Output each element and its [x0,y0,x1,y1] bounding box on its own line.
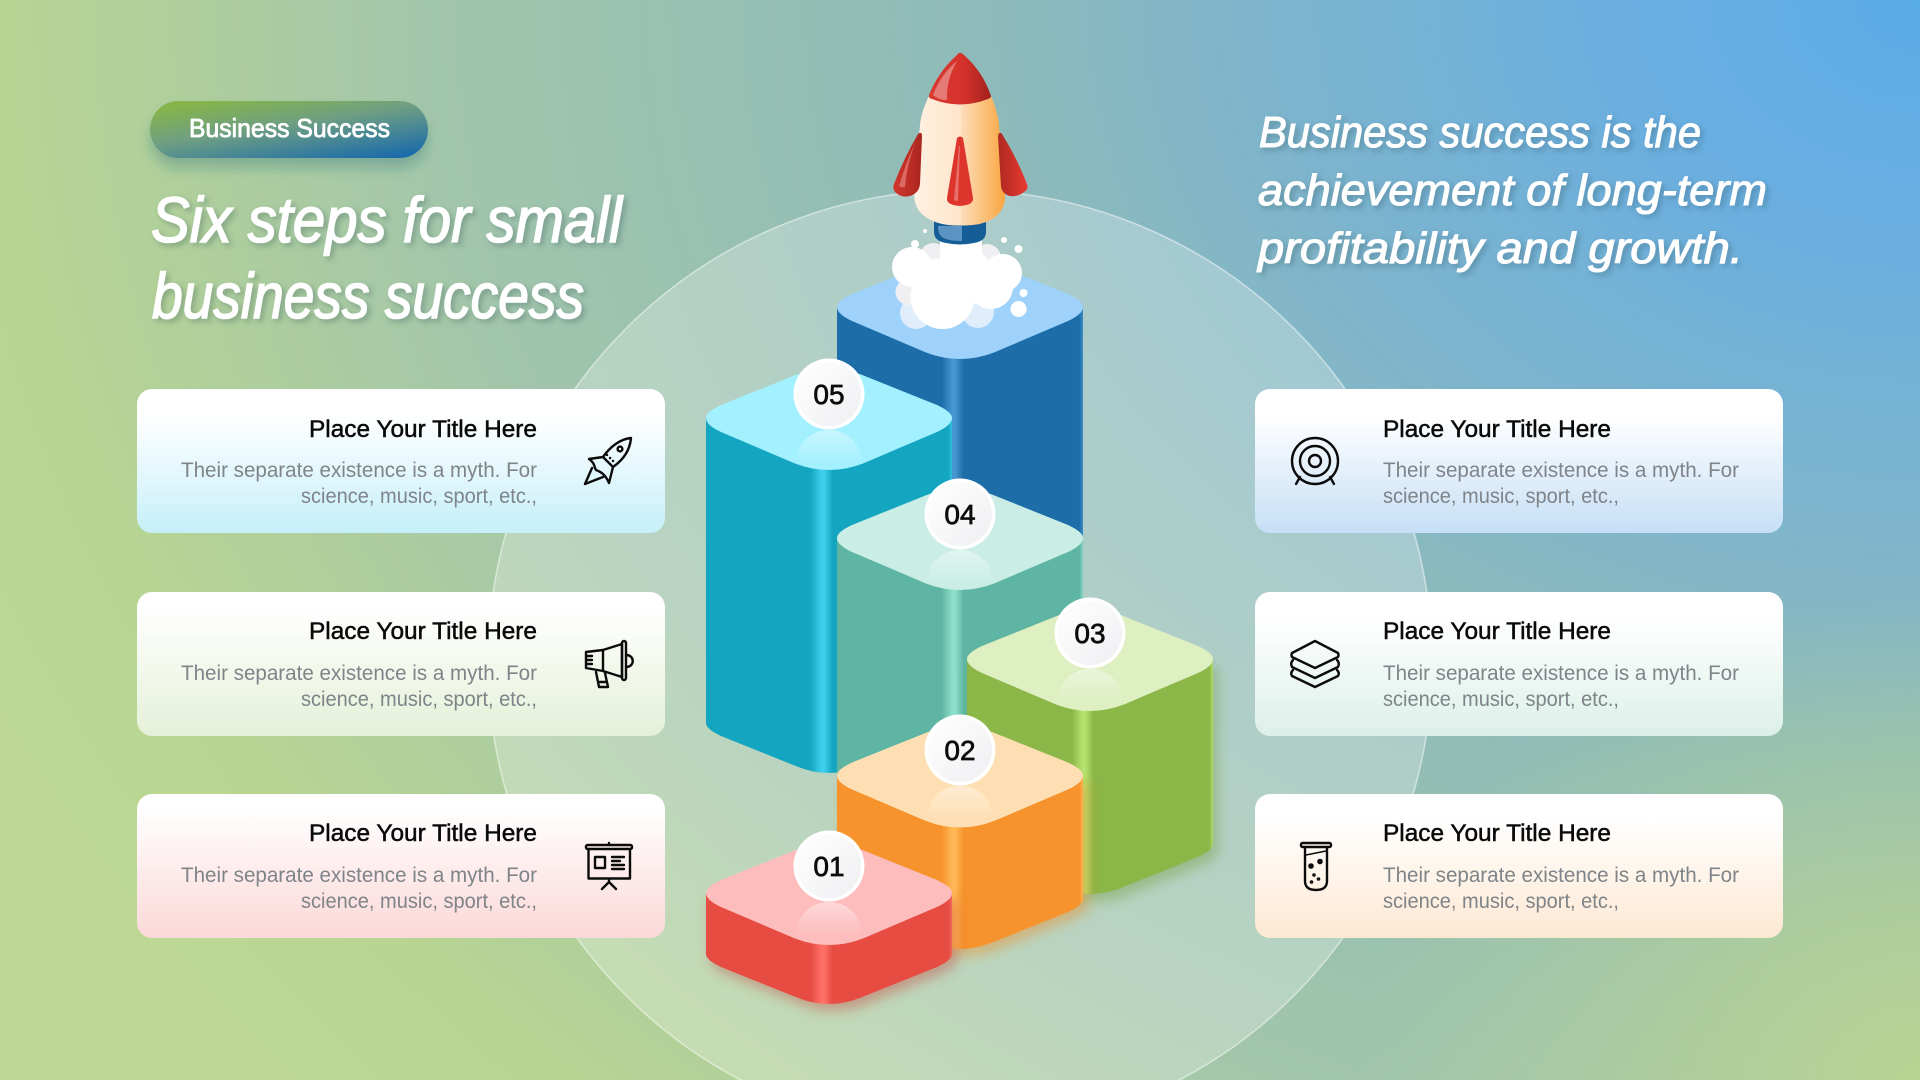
main title: Six steps for small [151,184,624,256]
badge 02 [924,714,996,846]
block 01: red column [706,843,957,1011]
block 02: orange column [837,726,1088,956]
panel: left card 3 [137,794,665,938]
panel: right card 1: Place Your Title Here [1383,416,1611,443]
block 05: cyan column [706,368,952,773]
panel: left card 3: Place Your Title Here [309,820,537,847]
panel: right card 1: science, music, sport, etc., [1383,485,1619,508]
badge 04 [924,478,996,610]
panel: left card 3: Their separate existence is a myth. For [181,864,537,887]
nozzle [934,218,986,244]
badge 05: 05 [813,379,845,410]
badge 03: 03 [1074,618,1106,649]
panel: right card 3: Place Your Title Here [1383,820,1611,847]
icon: target [1292,438,1338,484]
panel: left card 2 [137,592,665,736]
badge 05 [794,358,864,490]
icon: test tube [1301,843,1331,890]
icon: rocket [585,438,631,484]
badge 03 [1054,598,1126,729]
centre fin [947,136,973,206]
side fins [893,133,1028,197]
panel: left card 3: science, music, sport, etc., [301,890,537,913]
right statement heading [1256,108,1767,273]
panel: right card 2 [1255,592,1783,736]
badge 01 [794,830,864,962]
panel: left card 2: science, music, sport, etc., [301,688,537,711]
panel: left card 2: Place Your Title Here [309,618,537,645]
right statement heading: Business success is the [1259,108,1701,157]
panel: right card 2: Place Your Title Here [1383,618,1611,645]
panel: right card 2: science, music, sport, etc., [1383,688,1619,711]
nose cone [929,53,991,104]
badge 04: 04 [944,499,976,530]
icon: layers [1291,641,1339,687]
category pill: Business Success [150,101,428,168]
badge 02: 02 [944,735,976,766]
icon: megaphone [586,641,633,687]
rocket body [914,96,1005,226]
panel: right card 2: Their separate existence is a myth. For [1383,662,1739,685]
panel: right card 1 [1255,389,1783,533]
panel: right card 1: Their separate existence is a myth. For [1383,459,1739,482]
right statement heading: profitability and growth. [1256,224,1743,273]
block 06: blue column [837,257,1083,617]
block 04: teal column [837,488,1083,838]
panel: left card 2: Their separate existence is a myth. For [181,662,537,685]
icon: presentation board [586,843,632,889]
main title: business success [152,260,584,332]
badge 01: 01 [813,851,845,882]
main title [151,184,624,332]
panel: left card 1 [137,389,665,533]
translucent background circle [488,190,1432,1080]
panel: left card 1: Their separate existence is a myth. For [181,459,537,482]
panel: left card 1: Place Your Title Here [309,416,537,443]
rocket with exhaust cloud [892,53,1028,329]
exhaust cloud [892,229,1028,329]
panel: right card 3: Their separate existence is a myth. For [1383,864,1739,887]
category pill: Business Success: Business Success [189,113,390,143]
right statement heading: achievement of long-term [1258,166,1767,215]
block 03: green column [967,609,1218,902]
panel: right card 3: science, music, sport, etc., [1383,890,1619,913]
panel: right card 3 [1255,794,1783,938]
panel: left card 1: science, music, sport, etc., [301,485,537,508]
